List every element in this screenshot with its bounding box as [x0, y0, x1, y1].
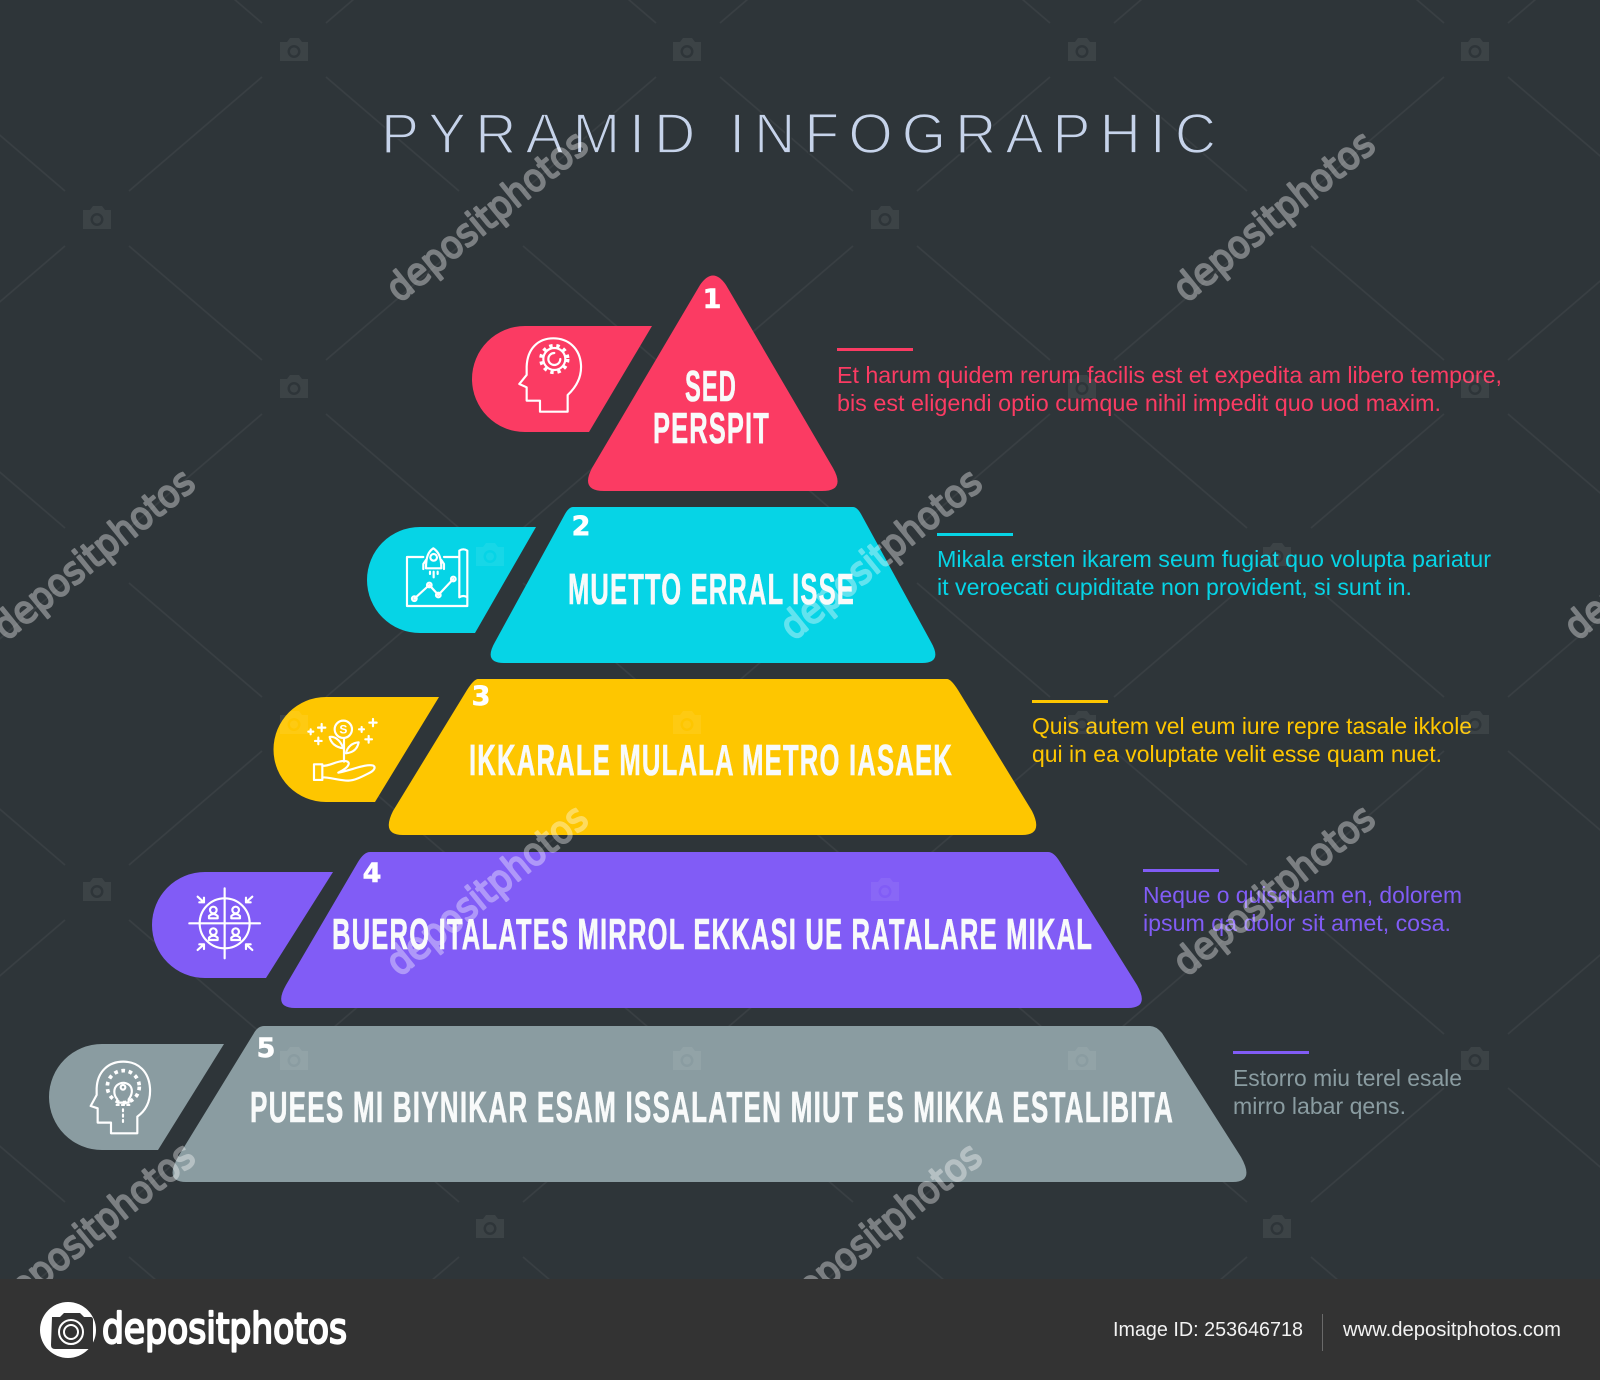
tier 1 panel — [472, 276, 1502, 491]
image id: Image ID: 253646718 — [1113, 1319, 1303, 1341]
watermark text: depositphotos — [377, 121, 596, 310]
tier 2 number: 2 — [572, 511, 590, 542]
watermark text: depositphotos — [377, 795, 596, 984]
tier 2 label: MUETTO ERRAL ISSE — [568, 565, 855, 614]
tier 1 triangle — [588, 276, 838, 491]
tier 5 description: mirro labar qens. — [1233, 1093, 1406, 1119]
footer logo: depositphotos — [102, 1304, 347, 1353]
tier 1 description: bis est eligendi optio cumque nihil impedit quo uod maxim. — [837, 390, 1441, 416]
tier 5 description — [1233, 1051, 1462, 1119]
tier 1 label: SED — [685, 362, 737, 411]
icon: rocket and chart blueprint — [407, 548, 467, 606]
icon: target with people — [189, 888, 260, 958]
icon: head with gear — [519, 338, 581, 412]
watermark text: depositphotos — [771, 459, 990, 648]
tier 1 number: 1 — [703, 284, 721, 315]
tier 1 description — [837, 348, 1502, 416]
watermark text: depositphotos — [1164, 795, 1383, 984]
tier 3 icon tab — [274, 697, 439, 802]
tier 2 description: Mikala ersten ikarem seum fugiat quo volupta pariatur — [937, 546, 1491, 572]
tier 1 label — [653, 362, 770, 453]
website: www.depositphotos.com — [1342, 1319, 1561, 1341]
tier 5 trapezoid — [173, 1026, 1246, 1182]
title: PYRAMID INFOGRAPHIC — [381, 102, 1216, 166]
tier 5 description: Estorro miu terel esale — [1233, 1065, 1462, 1091]
tier 1 icon tab — [472, 326, 652, 432]
tier 2 icon tab — [367, 527, 536, 633]
footer bar — [0, 1279, 1600, 1380]
tier 3 description — [1032, 700, 1472, 767]
tier 2 description — [937, 533, 1491, 600]
icon: head with light bulb — [91, 1062, 150, 1133]
tier 3 number: 3 — [472, 681, 490, 712]
tier 3 description: Quis autem vel eum iure repre tasale ikkole — [1032, 713, 1472, 739]
watermark text: depositphotos — [771, 1133, 990, 1322]
tier 2 trapezoid — [491, 507, 935, 663]
tier 5 number: 5 — [257, 1033, 275, 1064]
tier 4 trapezoid — [281, 852, 1142, 1008]
tier 4 description: Neque o quisquam en, dolorem — [1143, 882, 1462, 908]
tier 2 description: it veroecati cupiditate non provident, si sunt in. — [937, 574, 1412, 600]
tier 4 panel — [152, 852, 1462, 1008]
tier 3 description: qui in ea voluptate velit esse quam nuet. — [1032, 741, 1442, 767]
tier 5 panel — [49, 1026, 1462, 1182]
icon: hand growing money plant — [308, 719, 377, 781]
tier 2 panel — [367, 507, 1491, 663]
tier 4 number: 4 — [363, 858, 381, 889]
tier 1 description: Et harum quidem rerum facilis est et expedita am libero tempore, — [837, 362, 1502, 388]
tier 1 label: PERSPIT — [653, 404, 770, 453]
tier 4 description: ipsum qa dolor sit amet, cosa. — [1143, 910, 1451, 936]
watermark text: depositphotos — [1164, 121, 1383, 310]
icon: hand growing money plant: S — [339, 722, 347, 736]
tier 3 label: IKKARALE MULALA METRO IASAEK — [469, 736, 953, 785]
watermark cameras — [83, 38, 1489, 1238]
tier 4 icon tab — [152, 872, 333, 978]
tier 4 description — [1143, 869, 1462, 936]
footer logo — [40, 1302, 347, 1358]
tier 5 icon tab — [49, 1044, 224, 1150]
tier 3 panel — [274, 679, 1472, 835]
tier 3 trapezoid — [389, 679, 1036, 835]
